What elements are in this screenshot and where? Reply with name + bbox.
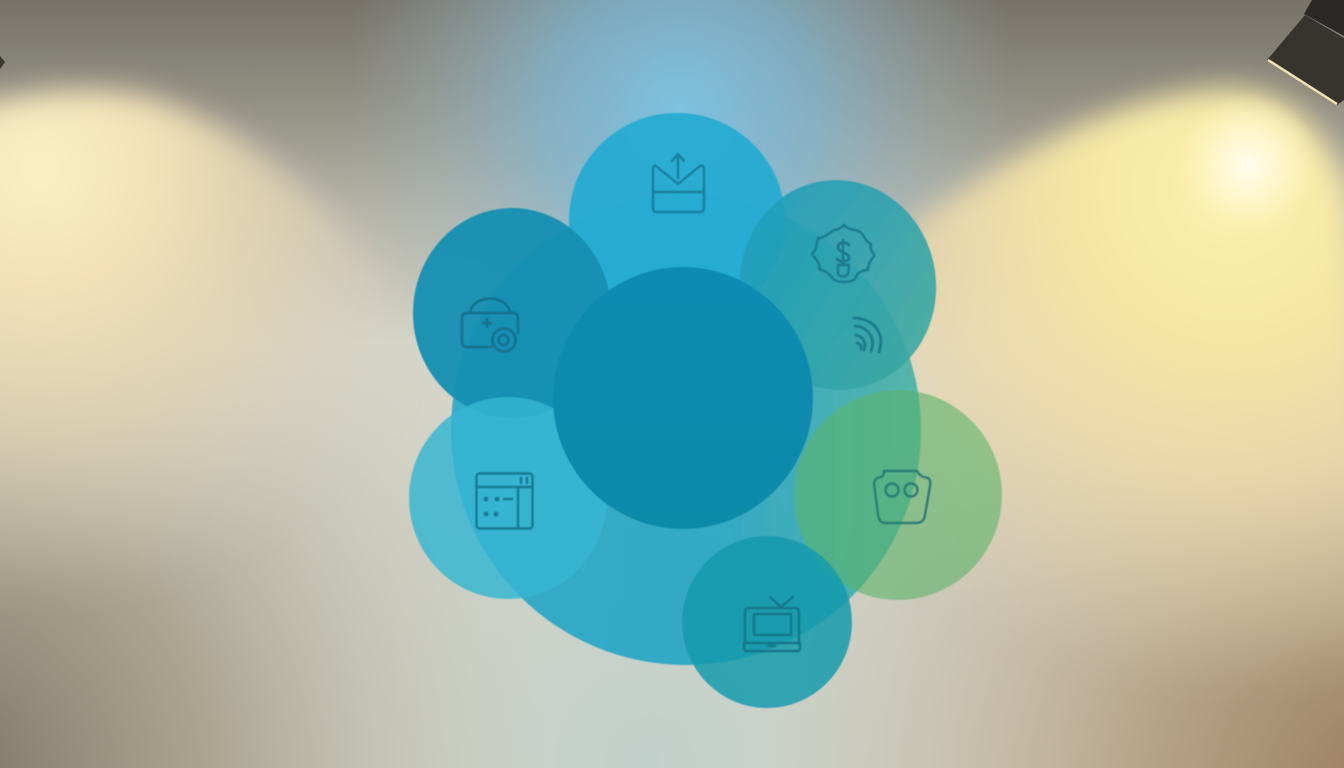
icon: wifi signal	[854, 318, 881, 352]
right warm light pool	[820, 89, 1344, 760]
circle: large background	[451, 195, 921, 665]
icon: dollar badge	[812, 225, 874, 282]
circle: lower left	[409, 397, 607, 599]
circle: upper left	[413, 208, 611, 418]
spotlight fixture: top right	[1267, 0, 1344, 105]
icon: laptop tv	[744, 597, 800, 651]
icon: robot face	[874, 471, 930, 523]
circle: center	[553, 267, 813, 529]
blue spotlight glow	[300, 0, 1060, 460]
bubble diagram	[409, 113, 1002, 708]
icon: envelope with up arrow	[653, 154, 704, 212]
circle: right green	[794, 390, 1002, 600]
circle: bottom	[682, 536, 852, 708]
icon: bag with camera lens	[462, 298, 518, 352]
circle: upper right	[726, 167, 950, 403]
spotlight fixture: left edge	[0, 56, 5, 69]
left warm light pool	[0, 90, 470, 720]
icon: browser window	[476, 474, 532, 528]
circle: top	[569, 113, 785, 327]
